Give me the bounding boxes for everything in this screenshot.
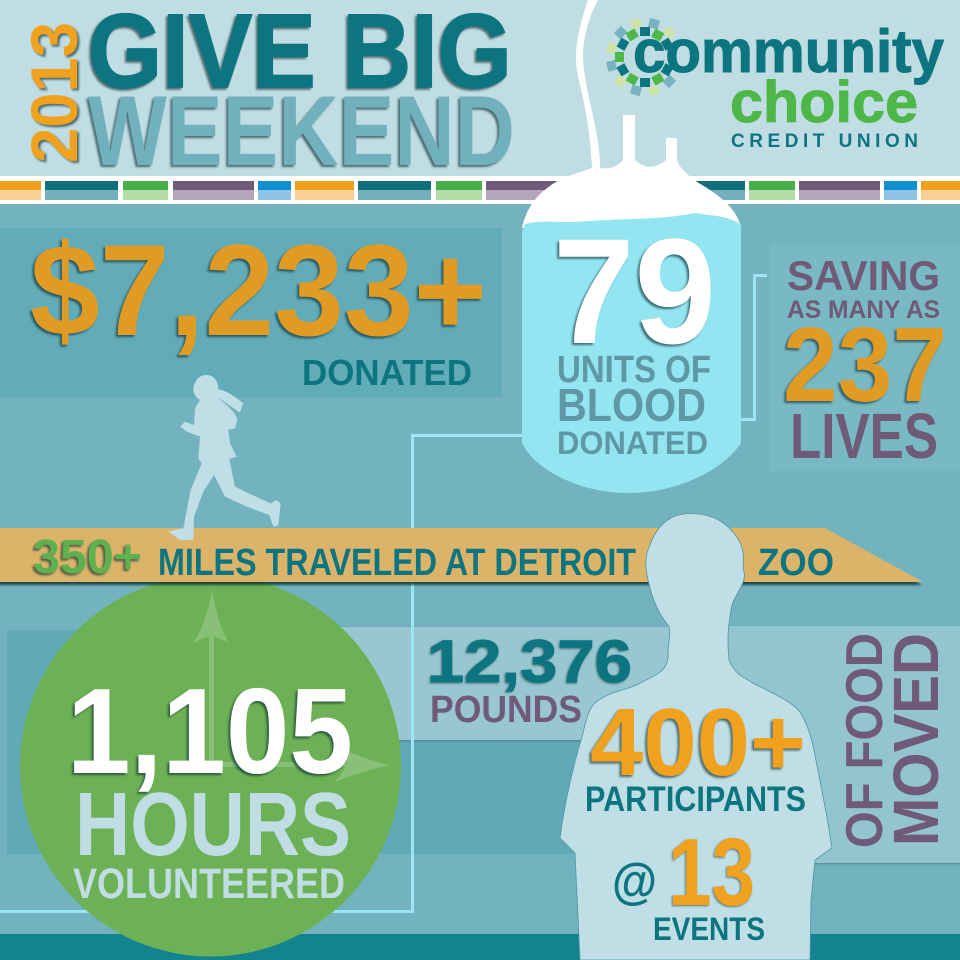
stat: 79 units: 79 — [553, 207, 716, 375]
icon: ghost arrows — [193, 590, 390, 782]
panel: saving lives background — [770, 244, 960, 471]
text: saving as many as 237 lives — [783, 252, 947, 472]
green circle: hours — [20, 576, 401, 956]
stat: 400+ participants: PARTICIPANTS — [585, 780, 806, 819]
logo word: credit union: CREDIT UNION — [731, 131, 918, 152]
label: hours: HOURS — [75, 775, 351, 875]
label: of food: OF FOOD — [836, 633, 894, 848]
stat: 7,233 dollars: $7,233+ — [30, 217, 487, 363]
stat: 1,105: 1,105 — [67, 663, 353, 799]
logo word: community: community — [633, 18, 945, 85]
panel: pounds background — [340, 627, 700, 740]
panel: food moved background — [700, 626, 960, 863]
colour stripe band — [0, 181, 960, 200]
label: donated: DONATED — [302, 352, 472, 393]
label: moved: MOVED — [880, 633, 952, 846]
logo word: choice: choice — [730, 70, 918, 135]
logo: Community Choice Credit Union — [606, 18, 945, 152]
label: pounds: POUNDS — [430, 689, 582, 731]
connector lines — [0, 274, 767, 913]
label: zoo: ZOO — [758, 542, 834, 584]
label: units of blood donated: UNITS OF — [557, 349, 711, 391]
panel: donated background — [0, 228, 502, 397]
stat: at 13 events: @ — [612, 853, 657, 909]
title: 2013: 2013 — [17, 22, 91, 163]
bottom band — [0, 934, 960, 960]
icon: blood bag — [522, 0, 741, 493]
stat: at 13 events — [612, 819, 765, 947]
ribbon — [0, 528, 923, 582]
stat: at 13 events: 13 — [668, 819, 755, 926]
text: saving as many as 237 lives: AS MANY AS — [787, 296, 940, 324]
stat: at 13 events: EVENTS — [653, 911, 765, 947]
text: saving as many as 237 lives: SAVING — [787, 252, 940, 299]
person silhouette — [560, 514, 832, 960]
label: volunteered: VOLUNTEERED — [73, 860, 345, 908]
icon: logo sunburst — [606, 18, 676, 96]
label: units of blood donated: DONATED — [557, 425, 708, 461]
stat: 350+: 350+ — [33, 531, 142, 584]
icon: runner silhouette — [168, 375, 281, 540]
label: units of blood donated: BLOOD — [557, 379, 706, 431]
text: saving as many as 237 lives: 237 — [783, 306, 947, 424]
stat: 12,376: 12,376 — [427, 628, 632, 695]
stat: 400+ participants: 400+ — [590, 689, 806, 796]
label: miles traveled: MILES TRAVELED AT DETROIT — [158, 542, 636, 584]
panel: volunteered background — [7, 630, 582, 854]
label: units of blood donated — [557, 349, 711, 461]
title: Weekend: WEEKEND — [88, 75, 515, 186]
